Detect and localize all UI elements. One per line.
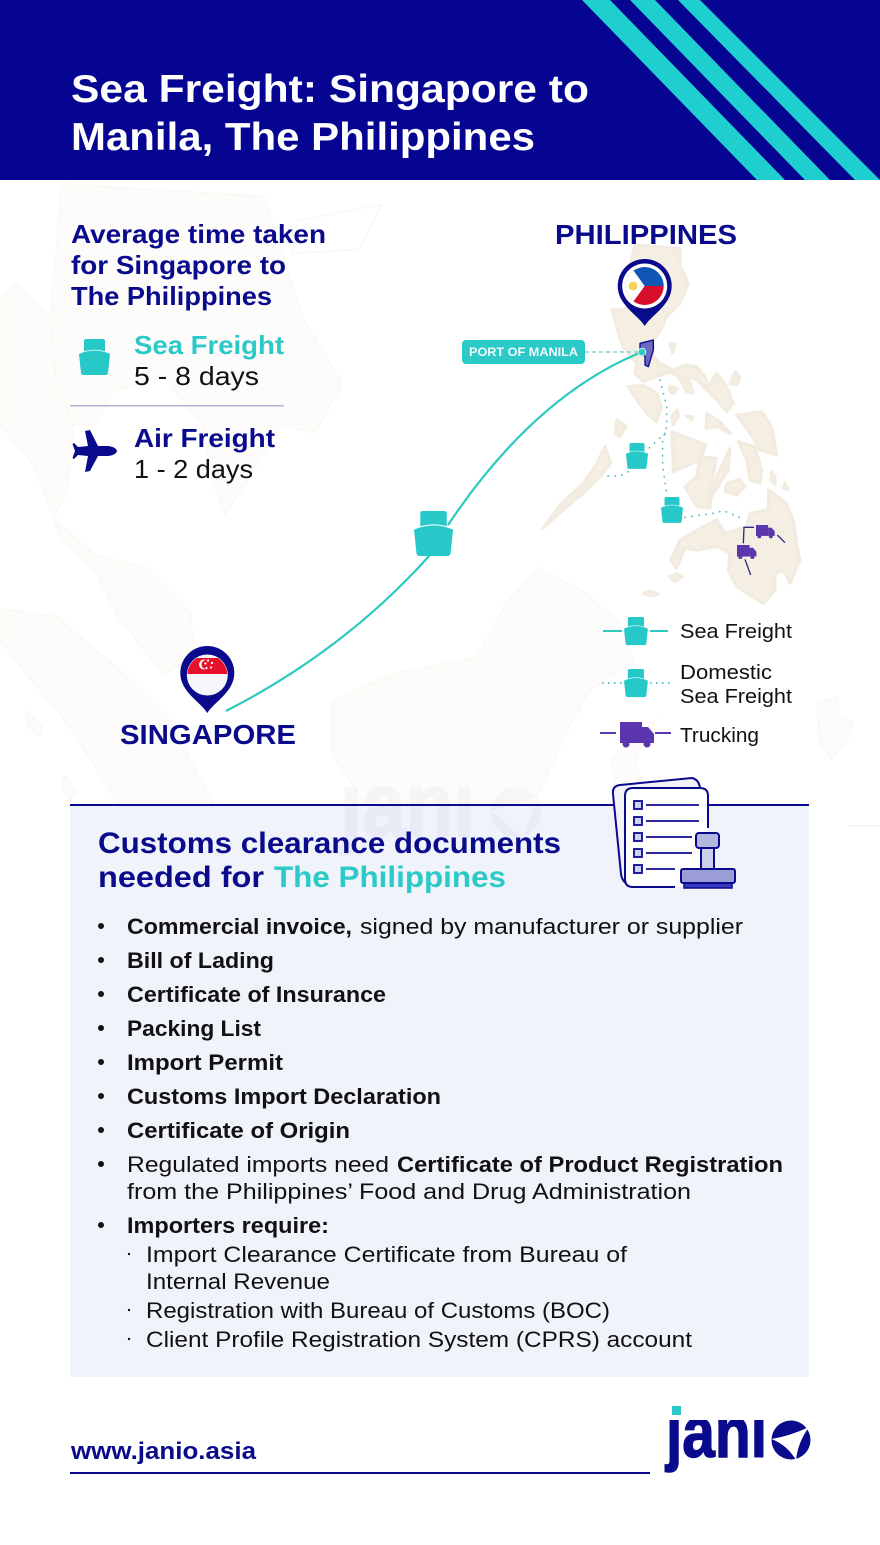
legend: sea freight [603,617,792,645]
panel heading: needed for [98,861,264,894]
document list: Bill of Lading [127,948,274,973]
pin: philippines [618,252,672,326]
document list: Registration with Bureau of Customs (BOC) [146,1298,610,1323]
title [71,68,589,159]
document list: Certificate of Origin [127,1118,350,1143]
average time heading: Average time taken [71,219,326,249]
port of manila callout [462,340,646,364]
janio logo: jani [664,1394,767,1473]
document list: Import Permit [127,1050,284,1075]
document list: Import Clearance Certificate from Bureau of [146,1242,628,1267]
icon: truck on mindanao [737,545,756,559]
legend: sea freight: Sea Freight [680,621,792,643]
map: philippines islands [543,245,800,603]
trucking routes [743,527,785,575]
document list: Certificate of Insurance [127,982,386,1007]
bullet markers [98,923,130,1340]
legend: trucking [600,722,759,748]
icon: domestic ship [661,497,683,523]
legend [600,617,792,748]
panel: customs clearance documents [70,754,809,1377]
icon: airplane [72,430,117,472]
panel heading: The Philippines [274,861,506,894]
document list: Client Profile Registration System (CPRS) account [146,1327,692,1352]
document list [98,914,783,1352]
singapore label: SINGAPORE [120,719,296,750]
icon: checklist and stamp [613,778,735,888]
document list: Commercial invoice, [127,914,352,939]
average time heading: The Philippines [71,281,272,311]
title: Manila, The Philippines [71,116,535,159]
icon: domestic ship [626,443,648,469]
document list: Regulated imports need [127,1152,389,1177]
document list: Customs Import Declaration [127,1084,441,1109]
average time heading: for Singapore to [71,250,286,280]
sea freight duration [134,330,284,391]
sea freight route singapore to manila [226,352,642,711]
philippines label: PHILIPPINES [555,219,737,250]
domestic sea freight routes [603,380,742,518]
manila region highlight [640,340,653,367]
title: Sea Freight: Singapore to [71,68,589,111]
document list: signed by manufacturer or supplier [360,914,743,939]
document list: Packing List [127,1016,262,1041]
legend: trucking: Trucking [680,725,759,747]
port of manila callout: PORT OF MANILA [469,345,578,359]
air freight duration: Air Freight [134,423,275,453]
panel heading [98,827,561,894]
decorative teal stripes [582,0,880,180]
legend: domestic sea freight: Domestic [680,662,772,684]
document list: Importers require: [127,1213,329,1238]
document list: Certificate of Product Registration [397,1152,783,1177]
document list: Internal Revenue [146,1269,330,1294]
pin: singapore [180,646,234,713]
sea freight duration: 5 - 8 days [134,361,259,391]
panel heading: Customs clearance documents [98,827,561,860]
air freight duration: 1 - 2 days [134,454,253,484]
sea freight duration: Sea Freight [134,330,284,360]
legend: domestic sea freight: Sea Freight [680,686,792,708]
icon: large ship on route [414,511,453,556]
average time heading [71,219,326,311]
faint regional map [0,184,854,804]
header banner [0,0,880,180]
legend: domestic sea freight [602,662,792,708]
document list: from the Philippines’ Food and Drug Administration [127,1179,691,1204]
air freight duration [134,423,275,484]
icon: sea freight ship [79,339,110,375]
icon: truck on mindanao [756,525,775,538]
watermark logo: jani [338,754,475,856]
website url: www.janio.asia [70,1438,257,1465]
